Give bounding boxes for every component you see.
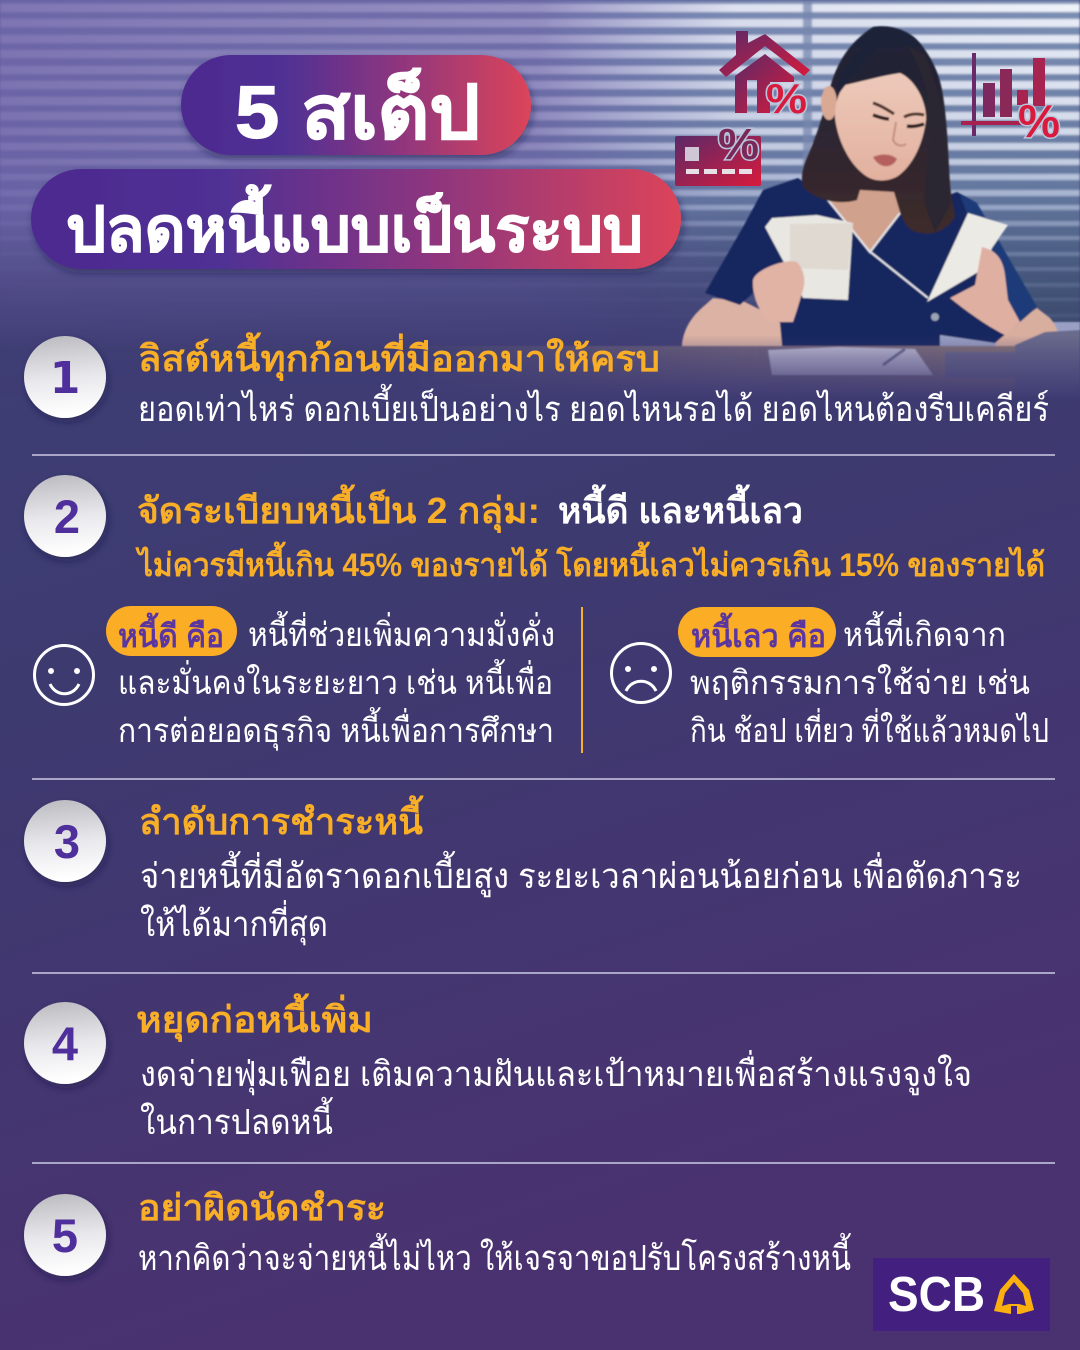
step 1	[24, 332, 1049, 429]
title pill: 5 steps	[181, 55, 531, 155]
eyes	[873, 115, 924, 126]
shirt	[705, 178, 1037, 346]
step 2	[24, 475, 1049, 753]
notebook	[768, 347, 933, 375]
icon: house with percent	[719, 31, 810, 122]
photo: woman reading bills	[400, 26, 1080, 396]
step 3	[24, 795, 1022, 945]
number badge 4: 4	[52, 1017, 78, 1070]
desk object	[1015, 330, 1080, 396]
icon: credit card with percent	[675, 120, 761, 186]
step 3 body: จ่ายหนี้ที่มีอัตราดอกเบี้ยสูง ระยะเวลาผ่อนน้อยก่อน เพื่อตัดภาระ	[140, 850, 1022, 897]
badge: good debt	[106, 606, 237, 656]
step 2 heading	[137, 484, 803, 534]
hair	[802, 26, 955, 234]
left hand	[753, 261, 804, 322]
background photo: window blinds	[0, 0, 1080, 347]
nose	[893, 122, 906, 146]
good debt text: และมั่นคงในระยะยาว เช่น หนี้เพื่อ	[118, 659, 553, 701]
good debt text	[118, 611, 555, 751]
title pill: systematic debt clearing	[31, 169, 681, 269]
icon: bar chart with percent: %	[1018, 95, 1060, 147]
hair strand beside face	[906, 45, 950, 232]
step 5	[24, 1187, 852, 1278]
step 2 heading: หนี้ดี และหนี้เลว	[558, 484, 803, 531]
logo: SCB: SCB	[888, 1268, 985, 1322]
icon: smiley	[34, 646, 94, 704]
right hand	[950, 247, 1020, 335]
number badge 5	[24, 1194, 106, 1276]
icon: bar chart with percent	[961, 53, 1060, 147]
number badge 1: 1	[50, 353, 80, 404]
number badge 3	[24, 800, 106, 882]
step 5 heading: อย่าผิดนัดชำระ	[138, 1187, 386, 1228]
ear	[821, 86, 837, 120]
step 3 body	[140, 850, 1022, 945]
calculator	[945, 352, 1017, 378]
number badge 1	[24, 336, 106, 418]
eyebrows	[873, 103, 924, 117]
step 4 body: งดจ่ายฟุ่มเฟือย เติมความฝันและเป้าหมายเพื่อสร้างแรงจูงใจ	[140, 1050, 972, 1095]
icon: house with percent: %	[766, 75, 807, 122]
right paper	[927, 213, 1008, 302]
title pill: 5 steps: 5 สเต็ป	[235, 69, 480, 154]
badge: bad debt	[678, 607, 836, 657]
step 4 body: ในการปลดหนี้	[140, 1096, 334, 1142]
title pill: systematic debt clearing: ปลดหนี้แบบเป็นระบบ	[66, 184, 643, 265]
step 5 body: หากคิดว่าจะจ่ายหนี้ไม่ไหว ให้เจรจาขอปรับโครงสร้างหนี้	[138, 1232, 852, 1278]
right arm	[995, 308, 1060, 346]
number badge 4	[24, 1002, 106, 1084]
step 1 heading: ลิสต์หนี้ทุกก้อนที่มีออกมาให้ครบ	[138, 332, 660, 382]
icon: sad face	[612, 644, 670, 702]
step 4 heading: หยุดก่อหนี้เพิ่ม	[136, 993, 373, 1043]
step 3 heading: ลำดับการชำระหนี้	[139, 795, 424, 842]
icon: credit card with percent: %	[718, 120, 759, 169]
logo: SCB	[873, 1258, 1050, 1331]
bad debt text: พฤติกรรมการใช้จ่าย เช่น	[690, 664, 1030, 701]
button	[931, 313, 939, 321]
good debt text: หนี้ที่ช่วยเพิ่มความมั่งคั่ง	[248, 611, 555, 653]
bad debt text: หนี้ที่เกิดจาก	[843, 611, 1006, 653]
step 4	[24, 993, 972, 1142]
good debt text: การต่อยอดธุรกิจ หนี้เพื่อการศึกษา	[118, 707, 554, 751]
mouth	[873, 155, 897, 166]
left paper	[765, 215, 853, 300]
badge: bad debt: หนี้เลว คือ	[691, 612, 826, 654]
bad debt text	[690, 611, 1049, 749]
neck	[828, 165, 908, 252]
step 4 body	[140, 1050, 972, 1142]
step 3 body: ให้ได้มากที่สุด	[140, 900, 328, 945]
collar piping	[828, 200, 928, 298]
step 2 heading: จัดระเบียบหนี้เป็น 2 กลุ่ม:	[137, 484, 540, 534]
panel: bad debt	[612, 607, 1049, 749]
number badge 3: 3	[54, 815, 80, 868]
badge: good debt: หนี้ดี คือ	[118, 612, 224, 654]
number badge 5: 5	[52, 1209, 78, 1262]
left arm	[682, 298, 785, 346]
number badge 2: 2	[54, 490, 80, 543]
panel: good debt	[34, 606, 555, 751]
number badge 2	[24, 475, 106, 557]
table	[400, 346, 1080, 396]
photo fade into background	[0, 335, 1080, 397]
wall below arms	[740, 322, 1080, 346]
face	[835, 73, 926, 180]
